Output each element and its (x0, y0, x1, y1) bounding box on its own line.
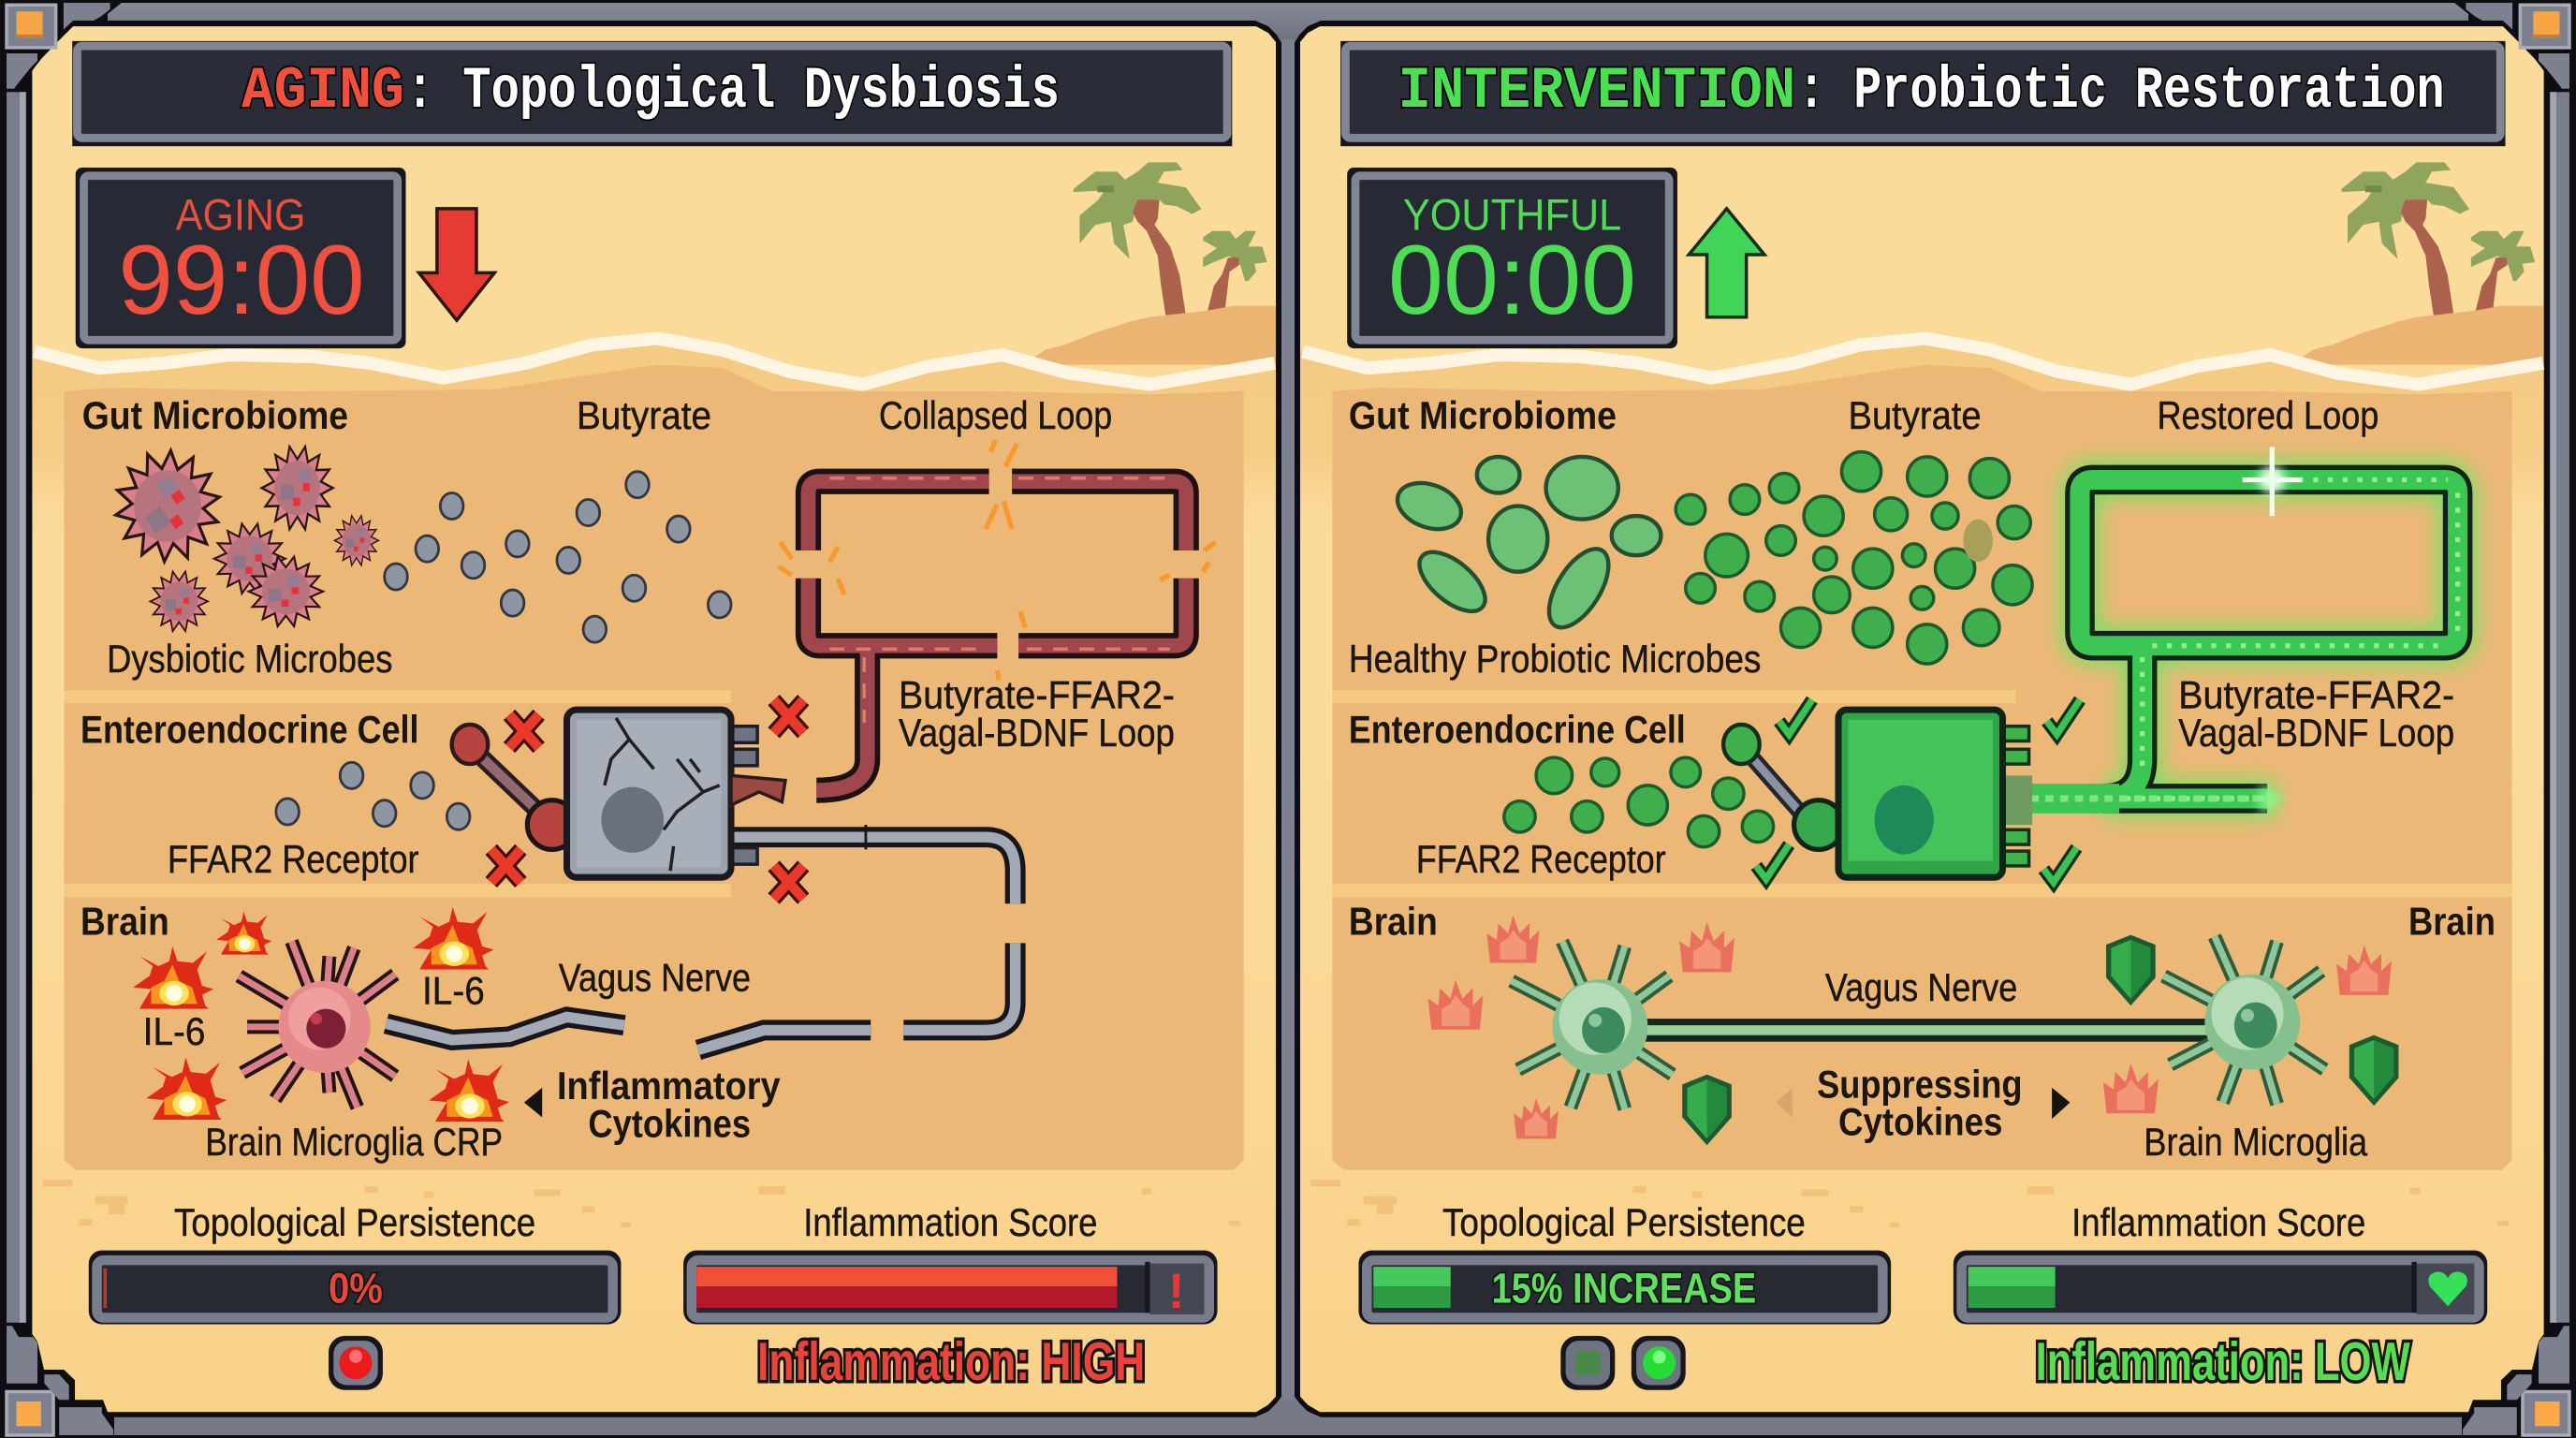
title text: : Topological Dysbiosis (406, 57, 1060, 125)
label: suppressing cytokines: Suppressing (1817, 1062, 2023, 1106)
youthful timer (1347, 168, 1677, 348)
label: butyrate FFAR2 vagal BDNF loop: Butyrate-FFAR2- (2178, 672, 2454, 716)
green check marks (1756, 700, 2080, 882)
panel background: sand sky (1300, 26, 2544, 1412)
label: brain microglia CRP: Brain Microglia CRP (205, 1120, 503, 1164)
frame corner: bottom right (2463, 1326, 2569, 1435)
strip between microbiome and cell sections (64, 690, 731, 703)
status LED red (329, 1336, 383, 1390)
label: butyrate FFAR2 vagal BDNF loop (2178, 672, 2454, 755)
title banner (1340, 41, 2506, 146)
panel: intervention (1300, 26, 2544, 1412)
gauge value: 0% (329, 1265, 383, 1313)
status: inflammation low: Inflammation: LOW (2036, 1332, 2410, 1392)
frame bar: right (2550, 92, 2569, 1323)
timer label: AGING (176, 191, 305, 241)
age timer (76, 168, 406, 348)
label: topological persistence: Topological Persistence (1442, 1200, 1806, 1244)
label: brain microglia: Brain Microglia (2144, 1120, 2368, 1164)
faded cytokine bursts (1428, 916, 2392, 1138)
arrow: right pointer (2052, 1088, 2070, 1119)
FFAR2 receptor healthy (1723, 725, 1843, 849)
arrow: up green (1689, 209, 1764, 317)
gauge: inflammation score low (1954, 1251, 2487, 1325)
label: inflammatory cytokines: Inflammatory (557, 1064, 781, 1108)
warning mark: ! (1168, 1264, 1184, 1319)
heading: gut microbiome: Gut Microbiome (82, 393, 348, 437)
timer digits: 00:00 (1388, 226, 1636, 335)
dune and palms (2303, 162, 2544, 365)
cell output stub (731, 775, 785, 805)
timer digits: 99:00 (118, 226, 365, 335)
loop break sparks (779, 440, 1216, 681)
heading: brain right: Brain (2408, 900, 2496, 944)
arrow: faded left pointer (1776, 1088, 1793, 1117)
sand content area (64, 365, 1244, 1170)
label: butyrate FFAR2 vagal BDNF loop (899, 672, 1175, 755)
title word: INTERVENTION (1398, 57, 1795, 125)
title word: AGING (242, 57, 404, 125)
enteroendocrine cell cracked (567, 710, 785, 877)
label: suppressing cytokines: Cytokines (1838, 1100, 2002, 1144)
label: inflammation score: Inflammation Score (2071, 1200, 2365, 1244)
healthy vagus nerve (1640, 1019, 2211, 1042)
broken grey nerve upper (386, 825, 1016, 1049)
shoreline wave (33, 339, 1276, 542)
strip between microbiome and cell sections (1332, 690, 2016, 703)
protective shields (1682, 935, 2398, 1145)
receptor butyrate molecules (1504, 757, 1774, 847)
label: IL-6 left: IL-6 (143, 1009, 205, 1053)
receptor butyrate molecules (276, 762, 470, 829)
panel: aging (32, 26, 1276, 1412)
heart icon (2428, 1271, 2467, 1306)
title banner (72, 41, 1232, 146)
label: butyrate FFAR2 vagal BDNF loop: Vagal-BDNF Loop (2178, 711, 2454, 755)
healthy probiotic microbes (1391, 457, 1661, 638)
gauge: topological persistence 0% (89, 1251, 621, 1325)
status LEDs green (1560, 1336, 1686, 1390)
label: IL-6 right: IL-6 (422, 968, 485, 1012)
timer label: YOUTHFUL (1403, 191, 1621, 241)
heading: gut microbiome: Gut Microbiome (1349, 393, 1617, 437)
heading: brain: Brain (80, 900, 169, 944)
label: FFAR2 receptor: FFAR2 Receptor (168, 837, 419, 881)
strip between cell and brain sections (1332, 884, 2512, 897)
enteroendocrine cell healthy (1838, 710, 2032, 877)
label: vagus nerve: Vagus Nerve (559, 955, 751, 999)
dune and palms (1035, 162, 1276, 365)
label: butyrate FFAR2 vagal BDNF loop: Butyrate-FFAR2- (899, 672, 1175, 716)
healthy microglia left (1512, 942, 1673, 1109)
inflammatory cytokine bursts (133, 907, 509, 1122)
collapsed loop (779, 440, 1216, 790)
frame corner: top right (2466, 3, 2569, 89)
panel background: sand sky (32, 26, 1276, 1412)
FFAR2 receptor damaged (452, 725, 577, 849)
loop spark (2243, 447, 2302, 516)
status: inflammation high: Inflammation: HIGH (757, 1332, 1145, 1392)
label: inflammatory cytokines: Cytokines (588, 1101, 751, 1145)
gauge: topological persistence 15% (1358, 1251, 1891, 1325)
frame corner: top left (7, 3, 110, 89)
butyrate molecules dense (1676, 452, 2032, 664)
label: butyrate: Butyrate (1848, 393, 1982, 437)
heading: enteroendocrine cell: Enteroendocrine Cell (80, 707, 419, 751)
label: restored loop: Restored Loop (2157, 393, 2378, 437)
stray olive molecule (1963, 520, 1993, 562)
sand speckles (1311, 1180, 2509, 1227)
sand speckles (43, 1180, 1240, 1227)
gauge: inflammation score high (683, 1251, 1218, 1325)
label: vagus nerve: Vagus Nerve (1825, 965, 2017, 1009)
frame bar: top (108, 3, 2468, 43)
healthy microglia right (2163, 936, 2324, 1104)
butyrate molecules sparse (385, 472, 731, 642)
dysbiotic microbes (90, 424, 380, 633)
label: healthy probiotic microbes: Healthy Probiotic Microbes (1349, 637, 1761, 681)
sand content area (1332, 365, 2512, 1170)
heading: brain left: Brain (1349, 900, 1438, 944)
label: dysbiotic microbes: Dysbiotic Microbes (107, 637, 392, 681)
label: butyrate FFAR2 vagal BDNF loop: Vagal-BDNF Loop (899, 711, 1175, 755)
label: inflammation score: Inflammation Score (803, 1200, 1097, 1244)
red x marks (491, 700, 803, 899)
gauge value: 15% INCREASE (1492, 1265, 1756, 1313)
strip between cell and brain sections (64, 884, 731, 897)
frame bar: center (1281, 39, 1295, 1400)
shoreline wave (1300, 339, 2544, 542)
inflamed microglia (239, 942, 395, 1108)
label: butyrate: Butyrate (577, 393, 711, 437)
restored loop glowing (2030, 447, 2458, 814)
frame corner: bottom left (7, 1326, 113, 1435)
label: FFAR2 receptor: FFAR2 Receptor (1416, 837, 1666, 881)
frame bar: left (7, 92, 26, 1323)
label: collapsed loop: Collapsed Loop (879, 393, 1112, 437)
frame bar: bottom (114, 1397, 2462, 1435)
arrow: left pointer (524, 1088, 542, 1117)
heading: enteroendocrine cell: Enteroendocrine Cell (1349, 707, 1686, 751)
label: inflammatory cytokines (557, 1064, 781, 1145)
arrow: down red (419, 209, 494, 320)
label: suppressing cytokines (1817, 1062, 2023, 1144)
signal arrow tip (2261, 784, 2284, 814)
label: topological persistence: Topological Persistence (174, 1200, 535, 1244)
